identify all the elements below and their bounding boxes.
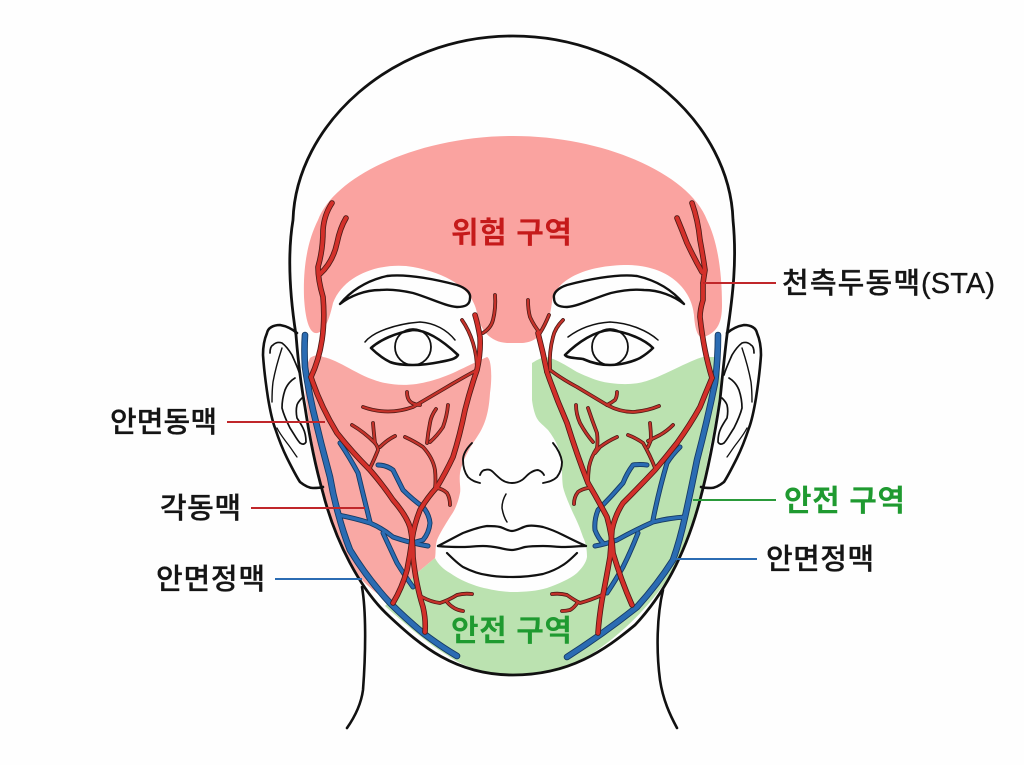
zone label: danger: 위험 구역 <box>451 217 572 250</box>
danger zone: left cheek <box>305 355 491 603</box>
callout: right facial vein: 안면정맥 <box>766 543 874 576</box>
right eye <box>565 322 658 365</box>
danger zone: forehead <box>304 136 722 343</box>
callout: left facial vein: 안면정맥 <box>156 563 265 596</box>
mouth <box>438 526 586 577</box>
callout: right safe zone: 안전 구역 <box>784 485 905 518</box>
safe zone: right cheek and chin <box>385 357 720 675</box>
left eyebrow <box>340 275 470 307</box>
nose <box>463 443 562 522</box>
callout: angular artery: 각동맥 <box>160 492 241 525</box>
blue veins <box>304 335 718 657</box>
left eye <box>365 322 458 365</box>
head outline <box>290 36 735 675</box>
right eyebrow <box>554 275 684 307</box>
zone label: chin safe: 안전 구역 <box>451 615 572 648</box>
right ear <box>701 325 761 488</box>
callout: facial artery: 안면동맥 <box>110 406 217 439</box>
callout: STA: 천측두동맥 <box>782 267 920 300</box>
callout: STA <box>703 267 995 300</box>
callout: STA: (STA) <box>921 268 995 300</box>
neck outline <box>347 587 677 728</box>
left ear <box>263 325 323 488</box>
red arteries <box>311 203 712 633</box>
